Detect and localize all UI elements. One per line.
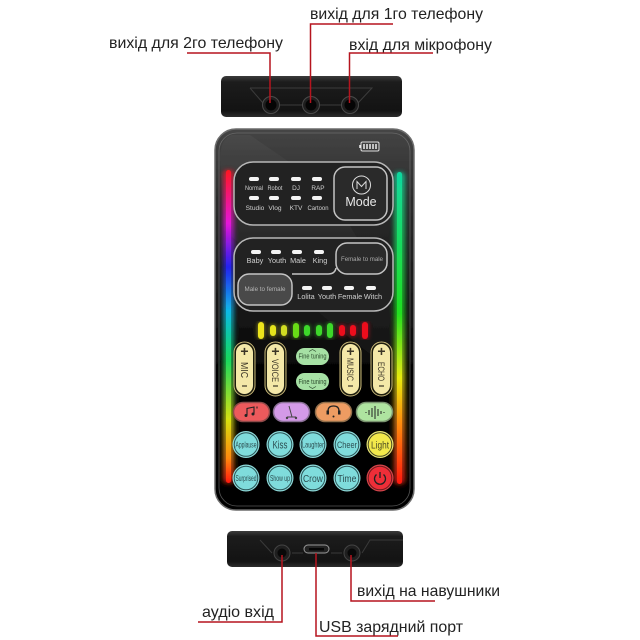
sound effect buttons row 1: Cheer <box>337 440 357 451</box>
character labels bottom: Witch <box>364 292 382 301</box>
slider: MUSIC: MUSIC <box>344 358 355 381</box>
slider: ECHO <box>371 342 392 396</box>
port: headphones <box>344 545 360 561</box>
slider: VOICE: + <box>271 343 280 359</box>
port: phone 2 jack <box>262 96 280 114</box>
mode labels row 1: DJ <box>292 185 300 192</box>
male to female button <box>238 274 292 305</box>
callout: USB charging port: USB зарядний порт <box>319 619 464 636</box>
callout: headphone output: вихід на навушники <box>357 583 500 600</box>
slider: ECHO: + <box>377 343 386 359</box>
callout: microphone input <box>349 37 492 103</box>
button: scooter effect <box>274 402 310 422</box>
device: front panel <box>215 129 414 510</box>
mode button: Mode <box>345 195 377 209</box>
character labels bottom <box>297 292 382 301</box>
callout: phone 2 output <box>109 35 283 103</box>
sound effect buttons row 1: Applause <box>236 440 257 450</box>
panel: voice characters <box>234 238 393 311</box>
sound effect buttons row 2: Surprised <box>236 474 256 483</box>
character labels top: King <box>313 256 327 265</box>
mode labels row 1: RAP <box>311 185 325 192</box>
mode labels row 1 <box>245 185 325 192</box>
device: bottom edge view <box>227 531 403 567</box>
port: microphone jack <box>342 96 358 114</box>
button: fine tuning down <box>296 373 329 390</box>
sound effect buttons row 2: Time <box>338 473 357 485</box>
female to male button: Female to male <box>341 256 383 263</box>
left RGB light bar <box>223 170 234 483</box>
slider: MUSIC: + <box>346 343 355 359</box>
character labels bottom: Female <box>338 292 362 301</box>
character labels bottom: Youth <box>318 292 336 301</box>
button: headset <box>316 402 352 422</box>
level meter <box>258 322 368 339</box>
button: music <box>234 402 270 422</box>
icon: battery <box>360 142 379 151</box>
slider: MIC <box>234 342 255 396</box>
sound effect buttons row 1 <box>232 431 394 458</box>
mode indicators row 2 <box>249 196 322 200</box>
mode labels row 2: Cartoon <box>308 205 329 212</box>
button: fine tuning down: Fine tuning <box>298 377 326 386</box>
button: power <box>366 464 394 492</box>
button: voice wave <box>356 402 392 422</box>
mode labels row 2 <box>246 205 329 212</box>
mode labels row 2: Studio <box>246 205 265 212</box>
button: light: Light <box>371 440 389 452</box>
character labels bottom: Lolita <box>297 292 316 301</box>
panel: voice modes <box>234 162 393 225</box>
character indicators bottom <box>302 286 376 290</box>
callout: headphone output <box>351 555 500 601</box>
character labels top: Male <box>290 256 306 265</box>
slider: MIC: MIC <box>238 362 249 378</box>
device: top edge view <box>221 76 402 117</box>
sound effect buttons row 2: Crow <box>303 473 323 485</box>
button: fine tuning up <box>296 348 329 365</box>
character labels top: Youth <box>268 256 286 265</box>
port: audio input <box>274 545 290 561</box>
character indicators top <box>251 250 324 254</box>
slider: ECHO: ECHO <box>375 362 386 381</box>
callout: audio input <box>198 555 282 622</box>
port: USB charging <box>304 545 329 553</box>
button: light <box>366 431 394 458</box>
sound effect buttons row 1: Kiss <box>272 440 288 452</box>
mode indicators row 1 <box>249 177 322 181</box>
sound effect buttons row 2 <box>232 464 394 492</box>
slider: VOICE: VOICE <box>269 359 280 382</box>
callout: USB charging port <box>316 553 464 636</box>
callout: phone 1 output <box>310 6 483 103</box>
callout: phone 2 output: вихід для 2го телефону <box>109 35 283 52</box>
mode labels row 2: Vlog <box>268 205 282 212</box>
character labels top: Baby <box>247 256 264 265</box>
mode labels row 1: Robot <box>268 185 283 192</box>
slider: MUSIC <box>340 342 361 396</box>
mode labels row 2: KTV <box>290 205 303 212</box>
mode labels row 1: Normal <box>245 185 263 192</box>
female to male button <box>336 243 387 274</box>
callout: microphone input: вхід для мікрофону <box>349 37 492 54</box>
sound effect buttons row 1: Laughter <box>302 440 324 450</box>
mode button <box>334 167 387 220</box>
male to female button: Male to female <box>244 286 286 293</box>
callout: phone 1 output: вихід для 1го телефону <box>310 6 483 23</box>
sound effect buttons row 2: Show up <box>270 474 290 483</box>
character labels top <box>247 256 327 265</box>
slider: MIC: + <box>240 343 249 359</box>
slider: VOICE <box>265 342 286 396</box>
button: fine tuning up: Fine tuning <box>298 352 326 360</box>
right RGB light bar <box>394 172 405 484</box>
port: phone 1 jack <box>302 96 320 114</box>
callout: audio input: аудіо вхід <box>202 604 275 621</box>
